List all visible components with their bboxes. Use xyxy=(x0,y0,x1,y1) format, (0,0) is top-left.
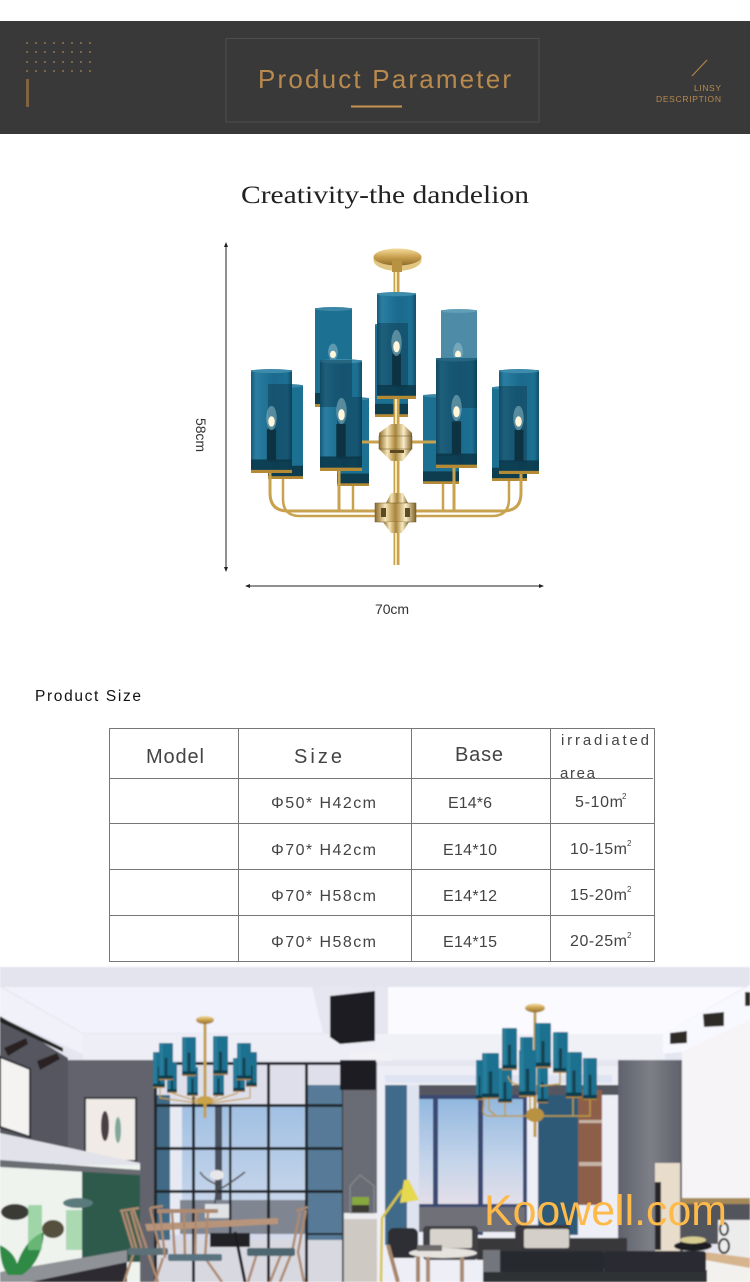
row 1: 5-10m xyxy=(575,794,623,811)
table header row: irradiated xyxy=(561,732,649,749)
aquarium xyxy=(0,1133,140,1282)
table grid xyxy=(110,728,654,962)
room scene photo xyxy=(0,967,750,1282)
watermark: Koowell.com: Koowell.com xyxy=(484,1188,727,1235)
title underline xyxy=(351,106,402,108)
row 4: 20-25m xyxy=(570,933,627,950)
row 3: 2 xyxy=(627,885,632,894)
row 3: 15-20m xyxy=(570,887,627,904)
text: LINSY DESCRIPTION xyxy=(656,83,721,104)
right gray wall xyxy=(618,1060,683,1282)
track lights xyxy=(0,1017,63,1070)
row 2: 10-15m xyxy=(570,841,627,858)
tall speaker xyxy=(655,1163,680,1251)
plants xyxy=(0,1232,44,1275)
text: LINSY DESCRIPTION: LINSY xyxy=(694,83,721,93)
row 2: Φ70* H42cm xyxy=(271,842,376,859)
label: Product Size: Product Size xyxy=(35,688,141,705)
table header row: Size xyxy=(294,746,342,768)
right white wall xyxy=(681,1020,750,1244)
table header row: area xyxy=(560,765,596,782)
overlaps where rear shades show through xyxy=(268,323,527,462)
row 4 xyxy=(271,931,632,951)
painting middle xyxy=(85,1098,136,1161)
ceiling canopy xyxy=(374,248,422,272)
dimension label: 58cm: 58cm xyxy=(193,418,209,452)
ceiling spot boxes xyxy=(670,992,750,1044)
heading: Creativity-the dandelion: Creativity-the dandelion xyxy=(241,182,530,209)
room chandelier right xyxy=(476,1004,597,1137)
text: LINSY DESCRIPTION: DESCRIPTION xyxy=(656,94,721,104)
window wall xyxy=(154,1062,345,1282)
dimension: width arrow xyxy=(245,584,544,588)
lower hub xyxy=(375,493,416,533)
row 4: Φ70* H58cm xyxy=(271,934,376,951)
coffee table xyxy=(409,1245,477,1282)
row 1 xyxy=(271,792,627,812)
row 2: 2 xyxy=(627,839,632,848)
row 3: E14*12 xyxy=(443,888,497,905)
decoration: vertical bar xyxy=(26,79,29,107)
row 2: E14*10 xyxy=(443,842,497,859)
row 3: Φ70* H58cm xyxy=(271,888,376,905)
yellow floor lamp xyxy=(381,1180,419,1282)
row 1: 2 xyxy=(622,792,627,801)
row 4: 2 xyxy=(627,931,632,940)
heading: Product Parameter: Product Parameter xyxy=(258,64,511,94)
back wall xyxy=(68,1060,158,1282)
stem and arms xyxy=(270,270,521,565)
table: product size xyxy=(110,728,654,962)
white speaker xyxy=(718,1220,750,1260)
table header row: Base xyxy=(455,744,503,766)
fruit bowl and counter xyxy=(674,1236,750,1282)
row 1: Φ50* H42cm xyxy=(271,795,376,812)
dimension label: 70cm: 70cm xyxy=(375,601,409,617)
room imagery xyxy=(0,967,750,1282)
table header row: Model xyxy=(146,746,204,768)
front shades xyxy=(251,292,539,474)
decoration: dot grid xyxy=(26,42,91,72)
row 2 xyxy=(271,839,632,859)
row 1: E14*6 xyxy=(448,795,492,812)
title frame xyxy=(226,38,539,122)
lounge chairs xyxy=(388,1225,627,1282)
dining table and chairs xyxy=(120,1170,308,1282)
ceiling xyxy=(0,967,750,1282)
room chandelier left xyxy=(153,1016,257,1118)
fish xyxy=(1,1204,29,1220)
dimension: height arrow xyxy=(224,242,228,572)
painting left xyxy=(0,1057,30,1137)
table header row xyxy=(146,732,649,782)
right room window and curtains xyxy=(377,1066,622,1282)
chandelier product image xyxy=(251,248,539,565)
side wall and counter xyxy=(343,1062,378,1282)
icon: slash xyxy=(692,60,707,76)
panel: header banner xyxy=(0,21,750,134)
row 4: E14*15 xyxy=(443,934,497,951)
row 3 xyxy=(271,885,632,905)
upper hub xyxy=(379,424,412,461)
black projector boxes xyxy=(330,991,392,1090)
sofa xyxy=(483,1250,707,1282)
left wall xyxy=(0,1016,68,1170)
rear shades xyxy=(268,307,527,486)
